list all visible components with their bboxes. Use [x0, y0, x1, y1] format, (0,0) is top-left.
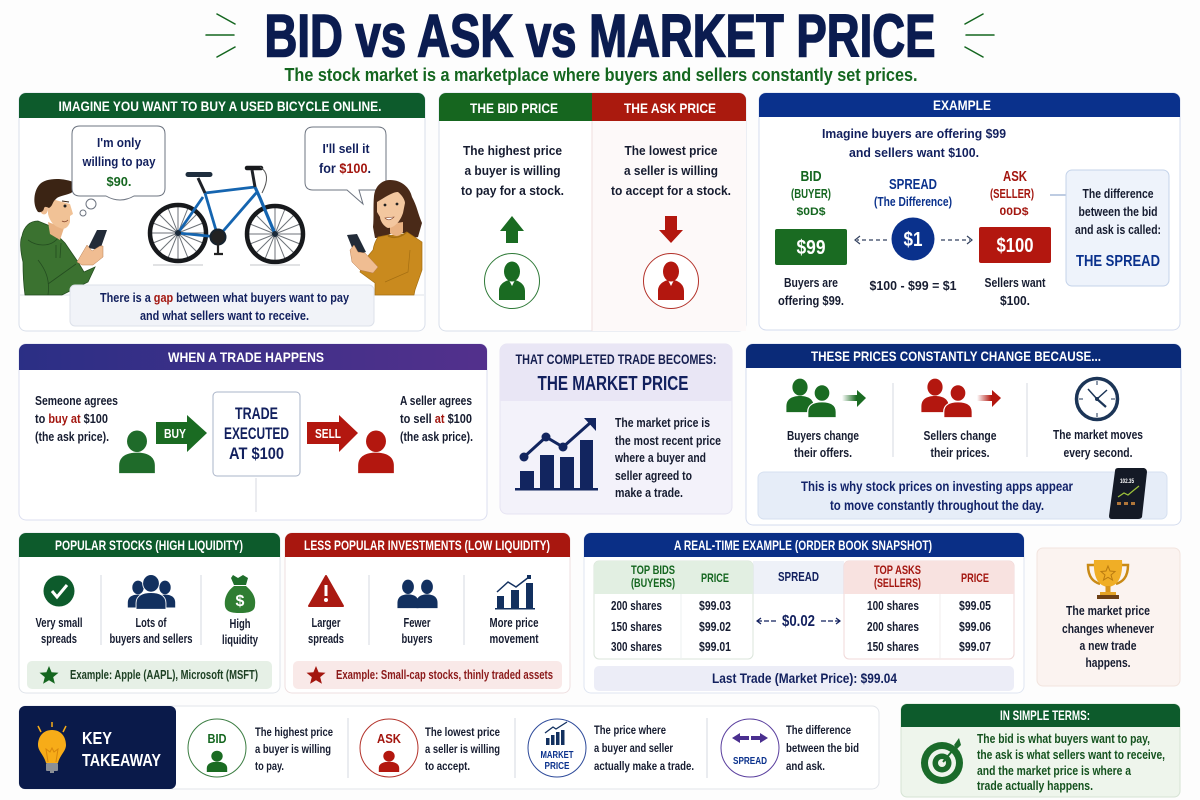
heading: key takeaway: KEY — [82, 728, 112, 748]
item: market price: actually make a trade. — [594, 761, 694, 773]
spread column: $100 - $99 = $1 — [870, 278, 956, 293]
speech bubble: seller: I'll sell it — [322, 141, 370, 156]
table: top asks: $99.07 — [959, 639, 991, 654]
illustration: bicycle — [150, 167, 303, 265]
title: BID vs ASK vs MARKET PRICE — [264, 2, 936, 70]
panel: bicycle scenario — [19, 93, 425, 331]
table: top asks — [844, 561, 1014, 659]
panel: prices change — [746, 344, 1181, 525]
text: simple summary: trade actually happens. — [977, 778, 1093, 793]
icon: buyers changing — [786, 379, 866, 418]
text: lots of buyers: Lots of — [136, 615, 167, 630]
panel: key takeaway — [19, 706, 879, 789]
text: market price definition: where a buyer and — [614, 450, 706, 465]
bid column — [775, 168, 847, 308]
text: market price definition: seller agreed to — [615, 468, 692, 483]
icon: down arrow — [659, 216, 683, 243]
spread column — [855, 176, 972, 293]
text: market price definition: The market price is — [615, 415, 710, 430]
text: very small spreads: spreads — [41, 631, 77, 646]
table: top bids: PRICE — [701, 571, 729, 585]
heading: example: EXAMPLE — [933, 97, 991, 113]
callout: the spread: between the bid — [1078, 204, 1158, 219]
box: trade executed: TRADE — [235, 405, 278, 423]
table: top bids: 150 shares — [611, 619, 662, 634]
text: market moves — [1053, 427, 1143, 460]
arrow: buy — [156, 415, 207, 452]
item: spread — [721, 719, 859, 777]
callout: low liquidity example — [293, 661, 562, 689]
item: bid: The highest price — [255, 727, 333, 739]
table: top asks: 100 shares — [867, 598, 919, 613]
icon: crowd — [128, 575, 175, 609]
panel: in simple terms — [901, 704, 1180, 797]
icon: buyer — [484, 254, 540, 308]
illustration: buyer — [21, 179, 107, 295]
text: lots of buyers: buyers and sellers — [110, 631, 192, 646]
heading: order book: A REAL-TIME EXAMPLE (ORDER BOOK SNAPSHOT) — [674, 537, 932, 553]
text: ask definition: The lowest price — [624, 143, 718, 158]
table: top bids — [594, 561, 753, 659]
text: buyers change: Buyers change — [787, 428, 859, 443]
panel: high liquidity — [19, 533, 280, 693]
text: seller agrees: (the ask price). — [400, 429, 473, 444]
item: bid: BID — [208, 732, 226, 746]
text: market price definition: the most recent price — [615, 433, 721, 448]
text: trophy note — [1062, 603, 1154, 670]
icon: phone: 102.35 — [1120, 479, 1134, 485]
text: high liquidity — [222, 616, 259, 647]
text: trophy note: a new trade — [1080, 638, 1136, 653]
text: seller agrees: A seller agrees — [400, 393, 472, 408]
item: market price: PRICE — [544, 761, 570, 772]
item: spread: and ask. — [786, 761, 825, 773]
item: ask: to accept. — [425, 761, 470, 773]
item: market price: a buyer and seller — [594, 743, 673, 755]
icon: clock — [1076, 378, 1118, 420]
text: larger spreads: Larger — [312, 615, 340, 630]
text: very small spreads — [36, 615, 82, 646]
speech bubble: buyer: $90. — [106, 174, 132, 189]
bid column: $0D$ — [796, 206, 826, 218]
text: more price movement — [490, 615, 539, 646]
callout: high liquidity example — [27, 661, 272, 689]
callout: gap — [70, 285, 374, 326]
arrow: sell — [307, 415, 358, 452]
bid column: (BUYER) — [791, 187, 831, 201]
table: top bids: (BUYERS) — [631, 576, 675, 590]
last trade bar — [594, 666, 1014, 691]
item: market price: MARKET — [540, 750, 574, 761]
icon: money bag — [225, 575, 255, 613]
spread column: SPREAD — [889, 176, 937, 193]
table: top asks: PRICE — [961, 571, 989, 585]
heading: trade: WHEN A TRADE HAPPENS — [168, 349, 324, 365]
text: buyer agrees: to buy at $100 — [35, 411, 108, 426]
callout: the spread: and ask is called: — [1075, 222, 1161, 237]
icon: seller — [358, 430, 394, 473]
panel: when a trade happens — [19, 344, 487, 520]
box: trade executed: EXECUTED — [224, 425, 289, 443]
spread column: $1 — [904, 229, 922, 251]
subtitle: The stock market is a marketplace where buyers and sellers constantly set prices. — [284, 64, 918, 85]
text: intro — [822, 126, 1006, 160]
panel: example — [759, 93, 1180, 330]
heading: completed trade: THAT COMPLETED TRADE BECOMES: — [516, 352, 716, 367]
box: trade executed — [213, 392, 300, 476]
text: intro: Imagine buyers are offering $99 — [822, 126, 1006, 141]
callout: high liquidity example: Example: Apple (AAPL), Microsoft (MSFT) — [70, 667, 258, 682]
spread indicator: $0.02 — [782, 613, 815, 630]
panel: order book — [584, 533, 1024, 693]
item: ask: The lowest price — [425, 727, 500, 739]
speech bubble: buyer: willing to pay — [82, 154, 156, 169]
bid column: offering $99. — [778, 293, 844, 308]
text: bid definition: to pay for a stock. — [461, 183, 564, 198]
heading: bid: THE BID PRICE — [470, 100, 558, 116]
item: ask: a seller is willing — [425, 744, 500, 756]
table: top bids: 200 shares — [611, 598, 662, 613]
text: seller agrees — [400, 393, 473, 444]
item: spread: The difference — [786, 725, 851, 737]
item: spread: between the bid — [786, 743, 859, 755]
heading: popular stocks: POPULAR STOCKS (HIGH LIQUIDITY) — [55, 537, 243, 553]
item: ask — [360, 719, 500, 777]
text: buyer agrees: (the ask price). — [35, 429, 109, 444]
text: buyers change: their offers. — [794, 445, 852, 460]
text: seller agrees: to sell at $100 — [400, 411, 472, 426]
text: trophy note: happens. — [1086, 655, 1130, 670]
text: market price definition: make a trade. — [615, 485, 683, 500]
bid column: BID — [800, 168, 822, 185]
heading: key takeaway — [82, 728, 161, 770]
text: buyers change — [787, 428, 859, 460]
text: high liquidity: liquidity — [222, 632, 259, 647]
decorative title rays — [206, 14, 994, 57]
item: bid: to pay. — [255, 761, 284, 773]
ask column — [979, 168, 1051, 308]
icon: volatile chart — [495, 575, 535, 610]
callout: investing apps — [758, 472, 1167, 519]
icon: check — [44, 576, 74, 606]
text: more price movement: More price — [490, 615, 538, 630]
heading: key takeaway: TAKEAWAY — [82, 750, 161, 770]
text: ask definition — [611, 143, 731, 198]
bid column: Buyers are — [784, 275, 838, 290]
text: trophy note: The market price — [1066, 603, 1150, 618]
text: fewer buyers — [402, 615, 432, 646]
item: ask: ASK — [377, 732, 401, 746]
table: top bids: TOP BIDS — [631, 563, 675, 577]
icon: warning — [309, 576, 343, 606]
text: bid definition — [461, 143, 564, 198]
text: fewer buyers: buyers — [402, 631, 432, 646]
text: market price definition — [614, 415, 721, 500]
text: fewer buyers: Fewer — [404, 615, 430, 630]
table: top bids: $99.02 — [699, 619, 731, 634]
heading: ask: THE ASK PRICE — [624, 100, 716, 116]
icon: money bag: $ — [236, 593, 245, 610]
ask column: Sellers want — [984, 275, 1046, 290]
ask column: 00D$ — [1000, 206, 1028, 218]
table: top bids: $99.03 — [699, 598, 731, 613]
icon: trophy — [1088, 560, 1128, 599]
illustration: seller — [347, 180, 422, 295]
icon: two people — [397, 580, 438, 608]
text: market moves: The market moves — [1053, 427, 1143, 442]
ask column: $100. — [1000, 293, 1030, 308]
text: buyer agrees — [35, 393, 118, 444]
panel: bid and ask — [439, 93, 746, 331]
callout: gap: and what sellers want to receive. — [140, 308, 309, 323]
text: larger spreads: spreads — [308, 631, 344, 646]
icon: buyer — [119, 430, 155, 473]
text: buyer agrees: Semeone agrees — [35, 393, 118, 408]
panel: low liquidity — [285, 533, 570, 693]
text: ask definition: a seller is willing — [624, 163, 718, 178]
icon: light bulb — [38, 722, 66, 772]
spread column: (The Difference) — [874, 194, 952, 209]
table: top asks: 200 shares — [867, 619, 919, 634]
item: bid: a buyer is willing — [255, 744, 331, 756]
callout: the spread: THE SPREAD — [1076, 253, 1160, 270]
callout: investing apps: This is why stock prices on investing apps appear — [801, 478, 1073, 494]
table: top asks: (SELLERS) — [874, 576, 921, 590]
arrow: sell: SELL — [315, 426, 341, 441]
text: bid definition: a buyer is willing — [464, 163, 561, 178]
text: lots of buyers — [110, 615, 192, 646]
text: trophy note: changes whenever — [1062, 621, 1154, 636]
item: market price: The price where — [594, 725, 666, 737]
item: market price — [528, 719, 694, 777]
table: top asks: $99.05 — [959, 598, 991, 613]
speech bubble: buyer — [72, 126, 165, 216]
last trade bar: Last Trade (Market Price): $99.04 — [712, 670, 897, 686]
text: simple summary: The bid is what buyers want to pay, — [977, 731, 1150, 746]
callout: the spread: The difference — [1082, 186, 1154, 201]
speech bubble: seller: for $100. — [319, 160, 371, 176]
icon: phone — [1109, 468, 1147, 519]
table: top bids: $99.01 — [699, 639, 731, 654]
text: bid definition: The highest price — [463, 143, 562, 158]
table: top bids: 300 shares — [611, 639, 662, 654]
table: top asks: 150 shares — [867, 639, 919, 654]
panel: market price — [500, 344, 732, 514]
speech bubble: buyer: I'm only — [97, 135, 142, 150]
bid column: $99 — [796, 237, 826, 259]
table: top asks: TOP ASKS — [874, 563, 921, 577]
icon: up arrow — [500, 216, 524, 243]
text: sellers change — [924, 428, 996, 460]
text: intro: and sellers want $100. — [849, 145, 979, 160]
text: ask definition: to accept for a stock. — [611, 183, 731, 198]
item: bid — [188, 719, 333, 777]
item: spread: SPREAD — [733, 755, 767, 767]
callout: investing apps: to move constantly throughout the day. — [830, 497, 1044, 513]
callout: low liquidity example: Example: Small-cap stocks, thinly traded assets — [336, 667, 553, 682]
text: sellers change: Sellers change — [924, 428, 996, 443]
spread indicator — [757, 570, 840, 630]
text: high liquidity: High — [230, 616, 251, 631]
text: market moves: every second. — [1064, 445, 1132, 460]
speech bubble: seller — [305, 127, 386, 204]
callout: gap: There is a gap between what buyers want to pay — [100, 290, 350, 305]
text: simple summary — [977, 731, 1165, 793]
text: larger spreads — [308, 615, 344, 646]
panel: trophy note — [1037, 548, 1180, 686]
icon: rising chart — [515, 418, 598, 490]
box: trade executed: AT $100 — [229, 445, 284, 463]
text: very small spreads: Very small — [36, 615, 82, 630]
text: simple summary: and the market price is where a — [977, 763, 1132, 778]
text: more price movement: movement — [490, 631, 539, 646]
text: sellers change: their prices. — [930, 445, 990, 460]
table: top asks: $99.06 — [959, 619, 991, 634]
heading: in simple terms: IN SIMPLE TERMS: — [1000, 707, 1090, 723]
arrow: buy: BUY — [164, 426, 186, 441]
heading: prices change: THESE PRICES CONSTANTLY CHANGE BECAUSE... — [811, 348, 1101, 364]
ask column: (SELLER) — [990, 187, 1034, 201]
heading: bicycle: IMAGINE YOU WANT TO BUY A USED BICYCLE ONLINE. — [58, 98, 382, 114]
heading: the market price: THE MARKET PRICE — [538, 373, 688, 395]
heading: less popular: LESS POPULAR INVESTMENTS (LOW LIQUIDITY) — [304, 537, 550, 553]
icon: seller — [644, 254, 698, 308]
icon: sellers changing — [921, 379, 1001, 418]
ask column: ASK — [1003, 168, 1027, 185]
icon: target — [921, 738, 963, 784]
spread indicator: SPREAD — [778, 570, 819, 584]
ask column: $100 — [996, 235, 1034, 257]
callout: the spread — [1050, 170, 1169, 286]
